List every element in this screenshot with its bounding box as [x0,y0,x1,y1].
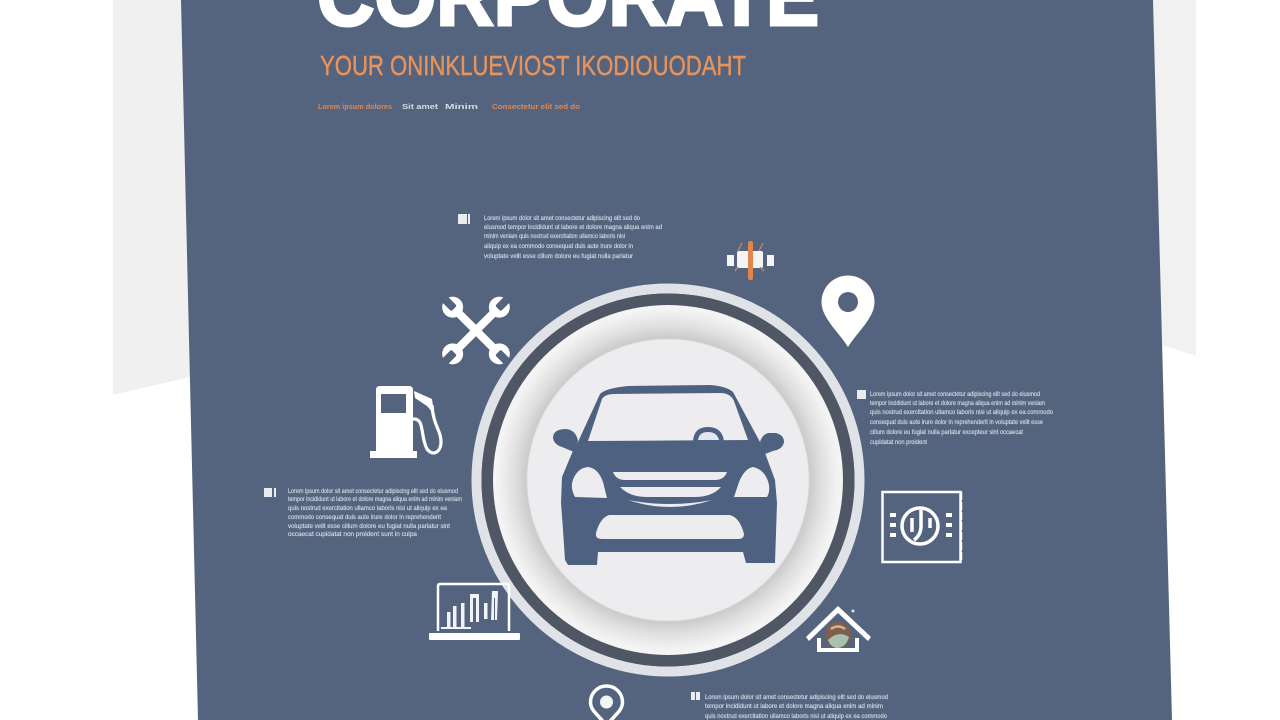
main panel [181,0,1172,720]
text block: top: aliquip ex ea commodo consequat duis aute irure dolor in [484,243,633,250]
right mirror [760,433,784,454]
text block: bottom: tempor incididunt ut labore et dolore magna aliqua enim ad minim [705,703,883,710]
text block: top: eiusmod tempor incididunt ut labore et dolore magna aliqua enim ad [484,224,662,231]
icon: fuel pump [370,386,441,458]
left mirror [553,429,578,452]
inner disc [527,339,809,621]
icon: house [806,606,871,652]
icon: car front [553,385,784,565]
windshield [588,393,748,441]
text block: right: consequat duis aute irure dolor in reprehenderit in voluptate velit esse [870,419,1043,426]
small header line: Minim [445,104,478,111]
small header line: Consectetur elit sed do [492,104,580,111]
text block: top: Lorem ipsum dolor sit amet consectetur adipiscing elit sed do [484,215,640,222]
text block: top: minim veniam quis nostrud exercitation ullamco laboris nisi [484,233,625,240]
lower intake [596,515,744,539]
right headlamp [734,467,769,497]
text block: left: voluptate velit esse cillum dolore eu fugiat nulla pariatur sint [288,523,450,530]
text block: right: Lorem ipsum dolor sit amet consectetur adipiscing elit sed do eiusmod [870,391,1040,398]
small header line: Lorem ipsum dolores [318,104,392,111]
icon: connector [727,241,774,280]
background sheet left [113,0,190,395]
central dial [476,288,860,672]
text block: top [458,214,662,260]
background sheet right [1140,0,1196,356]
shaded dish [493,305,843,655]
outer light ring [476,288,860,672]
text block: right: quis nostrud exercitation ullamco laboris nisi ut aliquip ex ea commodo [870,409,1053,416]
icon: framed emblem [882,492,962,562]
text block: left: occaecat cupidatat non proident sunt in culpa [288,531,417,538]
text block: left: Lorem ipsum dolor sit amet consectetur adipiscing elit sed do eiusmod [288,488,458,495]
text block: left: commodo consequat duis aute irure dolor in reprehenderit [288,514,441,521]
text block: bottom [691,692,888,720]
subtitle: YOUR ONINKLUEVIOST IKODIOUODAHT [320,50,746,81]
car body [561,385,777,565]
text block: left: tempor incididunt ut labore et dolore magna aliqua enim ad minim veniam [288,496,462,503]
text block: top: voluptate velit esse cillum dolore eu fugiat nulla pariatur [484,253,634,260]
small header line [318,104,580,111]
small header line: Sit amet [402,104,439,111]
grille bars [613,472,727,480]
mirror dome [693,427,724,441]
icon: outlined pin [590,686,622,720]
text block: bottom: quis nostrud exercitation ullamco laboris nisi ut aliquip ex ea commodo [705,713,887,720]
icon: crossed wrenches [437,291,515,370]
text block: left [264,488,462,538]
text block: right: cupidatat non proident [870,439,927,446]
text block: right [857,390,1053,446]
icon: laptop chart [429,584,520,640]
left headlamp [572,467,607,498]
dark ring [488,300,848,660]
text block: right: tempor incididunt ut labore et dolore magna aliqua enim ad minim veniam [870,400,1045,407]
text block: right: cillum dolore eu fugiat nulla pariatur excepteur sint occaecat [870,429,1023,436]
icon: map pin [822,276,874,347]
text block: bottom: Lorem ipsum dolor sit amet consectetur adipiscing elit sed do eiusmod [705,694,888,701]
text block: left: quis nostrud exercitation ullamco laboris nisi ut aliquip ex ea [288,505,447,512]
